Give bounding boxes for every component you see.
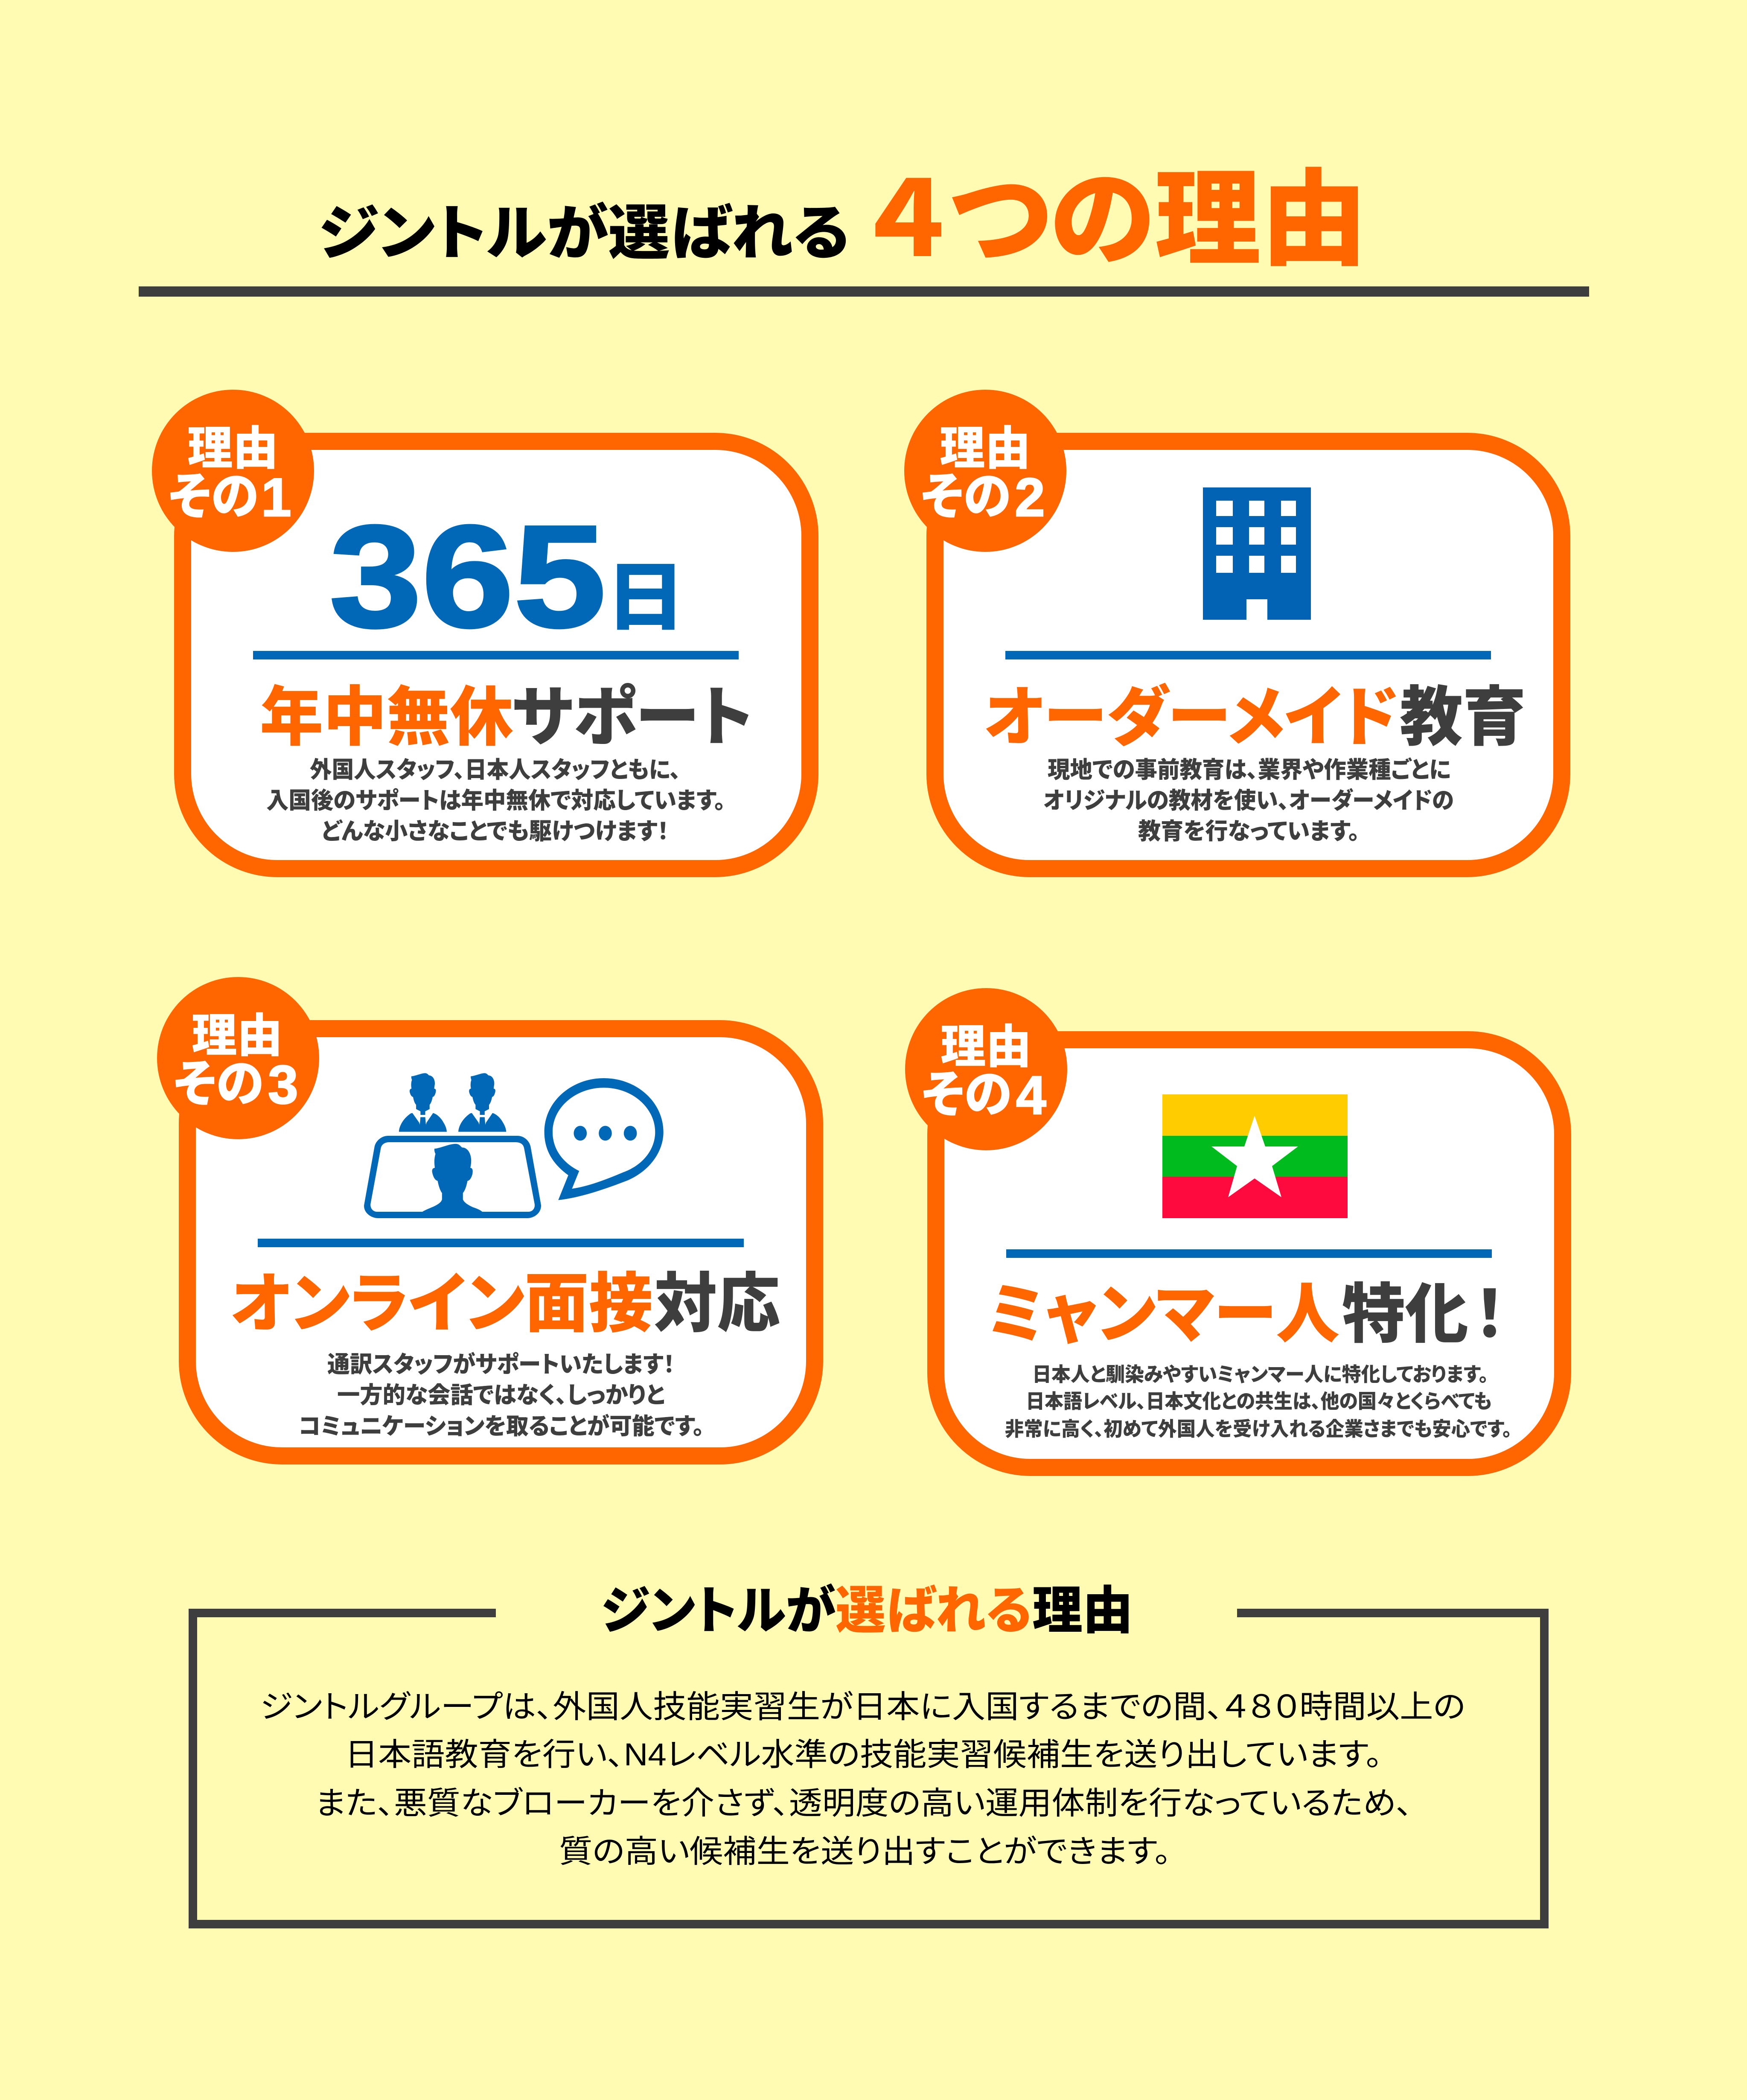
monitor frame [364, 1136, 541, 1218]
title text: dark part: ジントルが選ばれる [318, 200, 850, 267]
body text: reason 2: オリジナルの教材を使い、オーダーメイドの [1043, 788, 1454, 814]
badge: reason 2: 2 [1015, 467, 1045, 528]
badge: reason 4: 4 [1016, 1065, 1046, 1126]
blue divider [1005, 651, 1491, 659]
title underline [139, 286, 1589, 297]
body text: reason 2: 教育を行なっています。 [1138, 819, 1360, 844]
blue divider [258, 1239, 744, 1247]
summary body text: ジントルグループは、外国人技能実習生が日本に入国するまでの間、４８０時間以上の [260, 1689, 1465, 1724]
icon: online interview [364, 1073, 664, 1218]
person left [399, 1073, 447, 1132]
speech dots [574, 1126, 637, 1140]
summary heading: ジントルが [601, 1582, 836, 1639]
summary body text: 日本語教育を行い、N4レベル水準の技能実習候補生を送り出しています。 [345, 1737, 1382, 1772]
body text: reason 3 [299, 1351, 704, 1439]
summary body text: また、悪質なブローカーを介さず、透明度の高い運用体制を行なっているため、 [315, 1785, 1412, 1821]
body text: reason 1: どんな小さなことでも駆けつけます！ [321, 819, 669, 844]
body text: reason 4: 日本語レベル、日本文化との共生は、他の国々とくらべても [1026, 1390, 1492, 1412]
card frame [187, 1029, 815, 1456]
body text: reason 2 [1043, 757, 1454, 844]
title text: orange part: ４つの理由 [868, 161, 1367, 278]
summary frame [193, 1613, 1544, 1924]
heading: reason 1: サポート [512, 681, 753, 754]
panel: reason 1 [152, 390, 810, 869]
speech bubble [544, 1078, 664, 1200]
blue divider [253, 651, 739, 659]
body text: reason 2: 現地での事前教育は、業界や作業種ごとに [1048, 757, 1451, 783]
heading: reason 3: 対応 [654, 1268, 780, 1340]
body text: reason 3: 通訳スタッフがサポートいたします！ [327, 1351, 675, 1377]
badge: reason 1: 1 [261, 467, 291, 528]
panel: reason 3 [157, 977, 815, 1456]
summary heading [601, 1582, 1133, 1639]
badge: reason 4 [905, 988, 1067, 1150]
summary body text: 質の高い候補生を送り出すことができます。 [559, 1834, 1171, 1869]
icon: office building [1203, 487, 1311, 620]
panel: reason 4 [905, 988, 1563, 1467]
badge: reason 1: 理由 [187, 423, 278, 474]
badge: reason 2: 理由 [940, 423, 1031, 474]
body text: reason 3: コミュニケーションを取ることが可能です。 [299, 1413, 704, 1439]
body text: reason 4 [1005, 1363, 1512, 1440]
summary body text [260, 1689, 1465, 1869]
body text: reason 1 [266, 757, 725, 844]
badge: reason 3: その [173, 1056, 264, 1112]
body text: reason 4: 日本人と馴染みやすいミャンマー人に特化しております。 [1032, 1363, 1488, 1385]
icon: Myanmar flag [1162, 1094, 1348, 1218]
heading: reason 3: オンライン面接 [230, 1268, 653, 1340]
blue divider [1006, 1249, 1492, 1258]
badge: reason 1 [152, 390, 314, 552]
badge: reason 4: その [921, 1067, 1012, 1123]
big number: 365 days: 365 [329, 496, 606, 658]
panel: reason 2 [904, 390, 1562, 869]
heading: reason 1 [260, 681, 753, 754]
heading: reason 4 [987, 1278, 1521, 1351]
heading: reason 4: ミャンマー人 [987, 1278, 1339, 1351]
card frame [936, 1040, 1563, 1467]
badge: reason 3 [157, 977, 319, 1139]
card frame [935, 441, 1562, 869]
person right [458, 1073, 506, 1132]
badge: reason 2: その [920, 469, 1011, 525]
body text: reason 3: 一方的な会話ではなく、しっかりと [337, 1382, 665, 1408]
body text: reason 1: 外国人スタッフ、日本人スタッフともに、 [310, 757, 681, 783]
badge: reason 1: その [168, 469, 259, 525]
heading: reason 2: オーダーメイド [984, 681, 1398, 754]
badge: reason 3: 3 [268, 1054, 298, 1115]
panel: summary [193, 1582, 1544, 1924]
big number: 365 days [329, 496, 685, 658]
person on screen [422, 1144, 482, 1215]
card frame [183, 441, 810, 869]
big number: 365 days: 日 [606, 557, 685, 640]
body text: reason 1: 入国後のサポートは年中無休で対応しています。 [266, 788, 725, 814]
title [318, 161, 1367, 278]
heading: reason 4: ！ [1459, 1278, 1521, 1351]
badge: reason 2 [904, 390, 1066, 552]
heading: reason 1: 年中無休 [260, 681, 513, 754]
summary heading: 理由 [1032, 1582, 1133, 1639]
summary heading: 選ばれる [836, 1582, 1032, 1639]
heading: reason 4: 特化 [1342, 1278, 1468, 1351]
badge: reason 4: 理由 [940, 1021, 1031, 1073]
badge: reason 3: 理由 [192, 1010, 282, 1062]
body text: reason 4: 非常に高く、初めて外国人を受け入れる企業さまでも安心です。 [1005, 1418, 1512, 1440]
heading: reason 2: 教育 [1400, 681, 1526, 754]
